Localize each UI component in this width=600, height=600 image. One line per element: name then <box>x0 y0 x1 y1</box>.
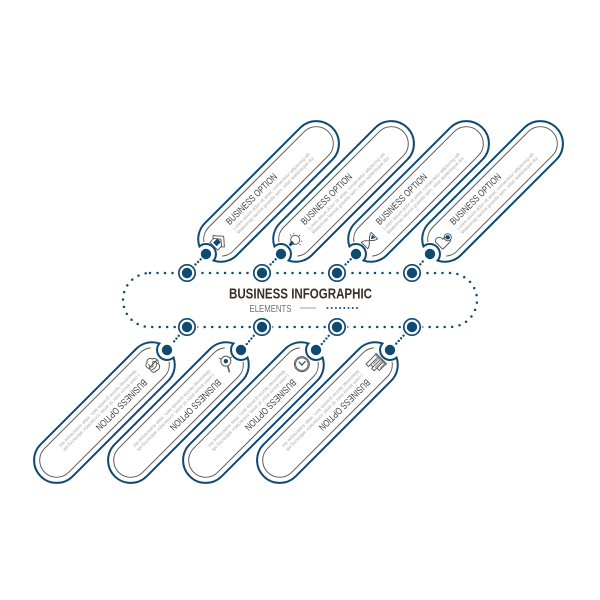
title: BUSINESS INFOGRAPHIC <box>229 285 372 302</box>
inner outline <box>423 120 564 261</box>
dotted connectors <box>172 259 425 345</box>
inner outline <box>107 343 248 484</box>
subtitle: ELEMENTS <box>250 303 292 315</box>
card outline <box>266 112 423 269</box>
text block: Maecenas lacinia gravida sem, vitae scelerisque dui <box>311 156 390 235</box>
card outline <box>415 112 572 269</box>
panel: business option 2 <box>261 112 423 274</box>
card outline <box>191 112 348 269</box>
text block: Maecenas lacinia gravida sem, vitae scelerisque dui <box>460 156 539 235</box>
icon: bar chart <box>365 353 387 375</box>
panel: business option 3 <box>336 112 498 274</box>
icon: heart with target <box>435 234 451 249</box>
icon: clock <box>294 357 309 372</box>
icon: hourglass <box>361 232 378 249</box>
card outline <box>341 112 498 269</box>
node dot <box>274 247 288 261</box>
node dot <box>423 247 437 261</box>
subtitle gray rule <box>300 307 316 309</box>
icon: house <box>208 231 229 252</box>
inner outline <box>182 343 323 484</box>
text block: Maecenas lacinia gravida sem, vitae scelerisque dui <box>58 369 137 448</box>
text block: Lorem ipsum dolor sit amet, consectetur adipiscing elit <box>232 151 311 231</box>
text block: Lorem ipsum dolor sit amet, consectetur adipiscing elit <box>456 151 535 231</box>
text block: Maecenas lacinia gravida sem, vitae scelerisque dui <box>281 369 360 448</box>
text block: Lorem ipsum dolor sit amet, consectetur adipiscing elit <box>211 373 290 453</box>
card outline <box>99 335 256 492</box>
icon: light bulb <box>284 230 305 251</box>
text block: Lorem ipsum dolor sit amet, consectetur adipiscing elit <box>62 373 141 453</box>
card outline <box>174 335 331 492</box>
icon: dollar swirl <box>143 355 163 374</box>
inner outline <box>33 343 174 484</box>
panel: business option 1 <box>186 112 348 274</box>
heading: BUSINESS OPTION <box>299 172 355 227</box>
heading: BUSINESS OPTION <box>316 377 372 432</box>
panel: business option 4 <box>410 112 572 274</box>
node dot <box>160 343 174 357</box>
node dot <box>383 343 397 357</box>
subtitle dotted rule <box>328 307 357 309</box>
node dot <box>349 247 363 261</box>
node dot <box>309 343 323 357</box>
panel: business option 8 <box>248 330 410 492</box>
node dot <box>234 343 248 357</box>
text block: Maecenas lacinia gravida sem, vitae scelerisque dui <box>236 156 315 235</box>
inner outline <box>349 120 490 261</box>
heading: BUSINESS OPTION <box>374 172 430 227</box>
heading: BUSINESS OPTION <box>93 377 149 432</box>
card outline <box>248 335 405 492</box>
text block: Maecenas lacinia gravida sem, vitae scelerisque dui <box>207 369 286 448</box>
inner outline <box>199 120 340 261</box>
inner outline <box>274 120 415 261</box>
text block: Lorem ipsum dolor sit amet, consectetur adipiscing elit <box>285 373 364 453</box>
panel: business option 6 <box>99 330 261 492</box>
icon: magnifier <box>219 356 232 372</box>
node dot <box>199 247 213 261</box>
heading: BUSINESS OPTION <box>242 377 298 432</box>
heading: BUSINESS OPTION <box>167 377 223 432</box>
card outline <box>25 335 182 492</box>
text block: Lorem ipsum dolor sit amet, consectetur adipiscing elit <box>382 151 461 231</box>
timeline nodes <box>176 262 422 338</box>
heading: BUSINESS OPTION <box>448 172 504 227</box>
text block: Lorem ipsum dolor sit amet, consectetur adipiscing elit <box>136 373 215 453</box>
panel: business option 5 <box>25 330 187 492</box>
text block: Maecenas lacinia gravida sem, vitae scelerisque dui <box>386 156 465 235</box>
panel: business option 7 <box>174 330 336 492</box>
inner outline <box>256 343 397 484</box>
dotted central track <box>123 273 477 327</box>
text block: Lorem ipsum dolor sit amet, consectetur adipiscing elit <box>307 151 386 231</box>
heading: BUSINESS OPTION <box>224 172 280 227</box>
text block: Maecenas lacinia gravida sem, vitae scelerisque dui <box>132 369 211 448</box>
